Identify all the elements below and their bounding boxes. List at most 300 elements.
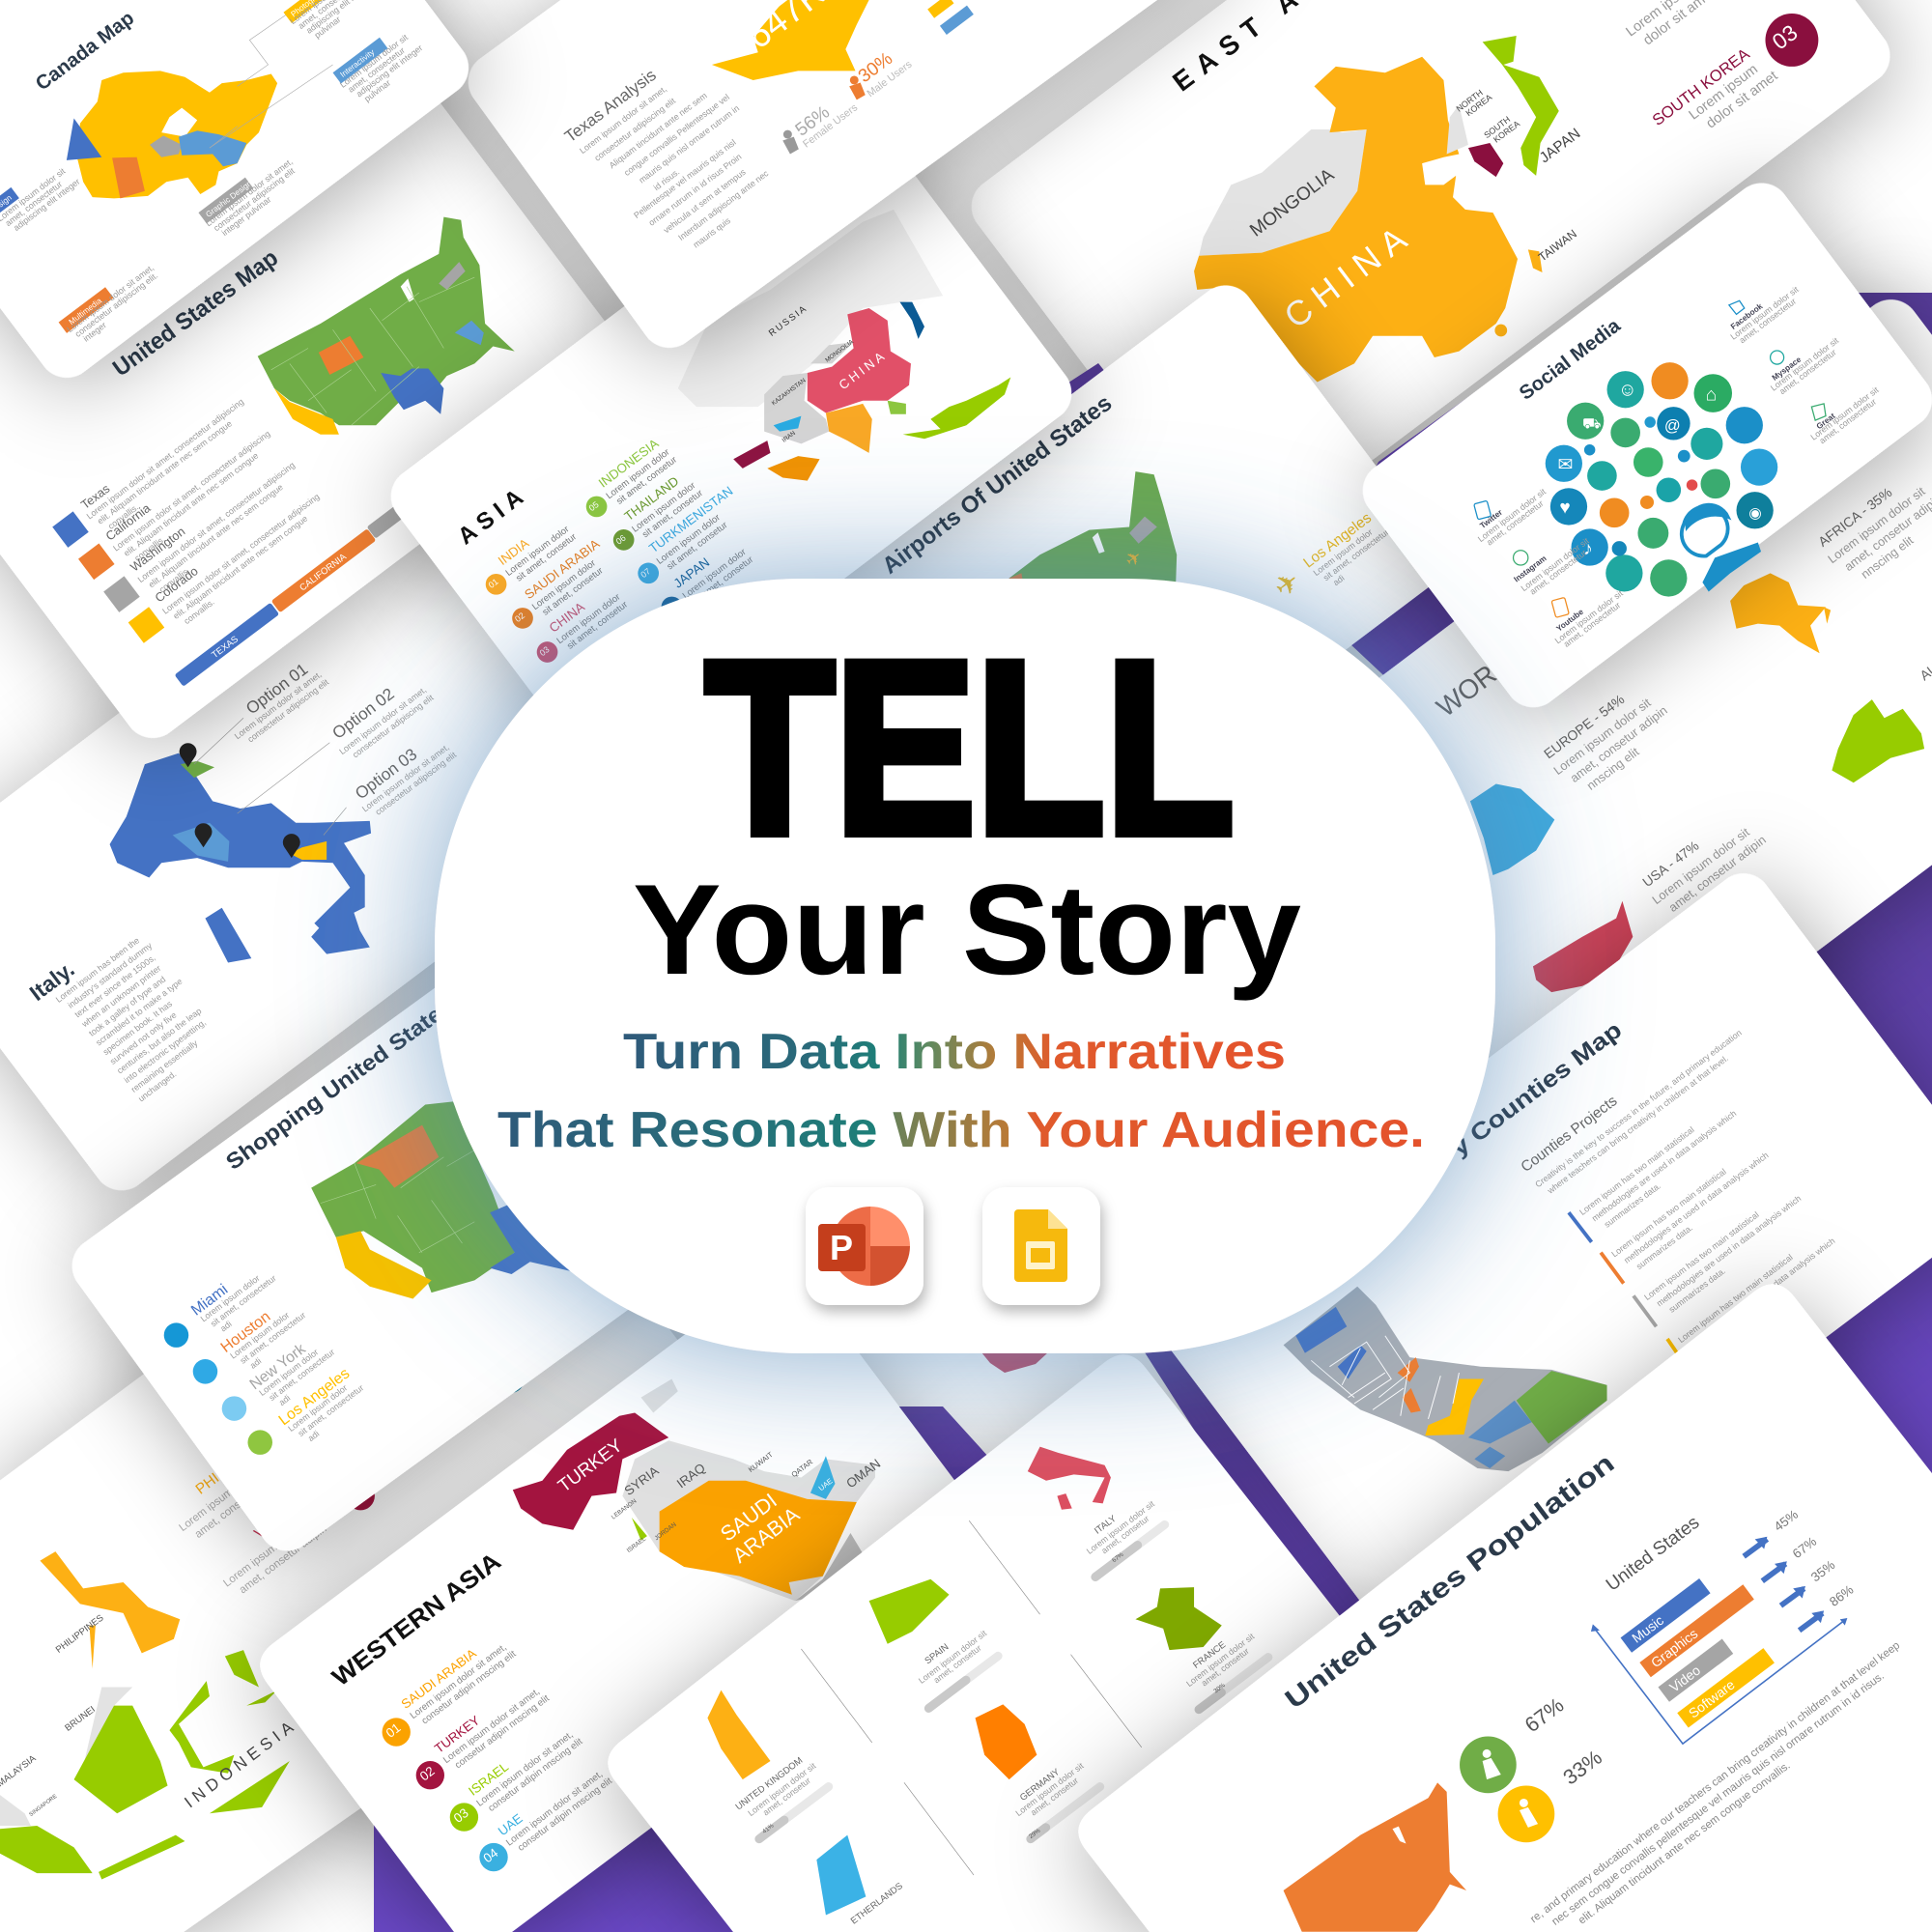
panel: Western Asia slide — [260, 1267, 1012, 1932]
panel: European countries slide: amet, consetur — [1029, 1776, 1080, 1817]
panel: Italy slide: consectetur adipiscing elit — [245, 677, 331, 744]
icon cluster: ◉ — [1748, 505, 1762, 522]
panel: Texas Analysis slide: Aliquam tincidunt ante nec sem — [608, 91, 709, 170]
panel: East Asia slide: Lorem ipsum — [1687, 62, 1761, 124]
panel: Italy slide: when an unknown printer — [79, 963, 162, 1030]
icon: PowerPoint: P — [830, 1228, 853, 1267]
panel: East Asia slide: MONGOLIA — [1246, 165, 1338, 242]
panel: European countries slide: 29% — [1028, 1828, 1042, 1840]
text block: population paragraph: re, and primary education where our teachers can bring creativity in children at that level keep — [1528, 1639, 1902, 1925]
panel: World slide: WOR — [1431, 659, 1502, 723]
panel: European countries slide: Lorem ipsum dolor sit — [1184, 1632, 1256, 1689]
panel: Airports Of United States slide: Los Angeles — [1300, 509, 1375, 571]
chart: bars: Software — [1686, 1676, 1738, 1721]
panel: United States Map slide: Lorem ipsum dolor sit amet, consectetur adipiscing — [136, 460, 297, 584]
map: Western Asia — [513, 1378, 875, 1601]
panel: World slide: Lorem ipsum dolor sit — [1649, 825, 1752, 907]
panel: Airports Of United States slide — [678, 273, 1454, 985]
panel: Southeast Asia slide: Lorem ipsum dolor sit amet, — [221, 1498, 338, 1589]
map: Italy — [1028, 1447, 1111, 1503]
panel: Western Asia slide: OMAN — [843, 1456, 883, 1491]
panel: United States Map slide: CALIFORNIA — [298, 552, 349, 593]
panel: Canada Map slide: integer — [81, 320, 108, 344]
panel: Asia slide: RUSSIA — [767, 303, 810, 339]
panel: Social Media slide: Lorem ipsum dolor sit — [1476, 487, 1548, 544]
map: Germany — [976, 1704, 1037, 1779]
panel: United States Map slide: Lorem ipsum dolor sit amet, consectetur adipiscing — [85, 397, 245, 521]
panel: Western Asia slide: Lorem ipsum dolor sit amet, — [504, 1769, 605, 1848]
panel: central title pill — [435, 579, 1495, 1353]
panel: Social Media slide: Instagram — [1512, 554, 1548, 584]
panel: Social Media slide: Social Media — [1516, 315, 1625, 405]
panel: Asia slide: 05 — [587, 499, 601, 513]
panel: Counties Map slide: methodologies are used in data analysis which — [1590, 1108, 1738, 1223]
panel: Canada Map slide: integer pulvinar — [220, 194, 272, 238]
icon cluster: ♥ — [1559, 497, 1571, 518]
panel: Counties Map slide: methodologies are used in data analysis which — [1622, 1151, 1771, 1265]
panel: Southeast Asia slide: amet, consetur adipin — [193, 1467, 285, 1541]
panel: Social Media slide: Twitter — [1478, 507, 1505, 530]
panel: Italy slide: Option 01 — [242, 659, 311, 718]
panel: Shopping United States slide: Miami — [188, 1281, 231, 1320]
map: world continents — [1470, 573, 1924, 992]
panel: Southeast Asia slide: PHILIPPINES — [193, 1430, 275, 1498]
panel: Canada Map slide: pulvinar — [313, 14, 343, 41]
panel: Western Asia slide: Lorem ipsum dolor sit amet, — [409, 1642, 509, 1721]
panel: United States Map slide: Washington — [128, 524, 187, 574]
panel: Counties Map slide — [1146, 862, 1932, 1657]
panel: Western Asia slide: ARABIA — [728, 1502, 805, 1568]
panel: Social Media slide: amet, consectetur — [1738, 297, 1798, 345]
panel: East Asia slide: dolor sit amet — [1704, 69, 1780, 131]
panel: Italy slide: specimen book. It has — [101, 999, 174, 1057]
chart: bars: 67% — [1790, 1534, 1819, 1561]
panel: Italy slide: scrambled it to make a type — [94, 977, 185, 1047]
panel: Texas Analysis slide: id risus. — [652, 167, 681, 192]
panel: Shopping United States slide: Lorem ipsum dolor — [286, 1382, 349, 1434]
panel: Canada Map slide: Canada Map — [32, 8, 138, 95]
panel: Asia slide: sit amet, consetur — [541, 565, 606, 618]
map: Canada — [67, 71, 277, 198]
panel: Counties Map slide: summarizes data. — [1667, 1265, 1727, 1315]
panel: Airports Of United States slide: Airports Of United States — [877, 390, 1117, 580]
panel: Social Media slide: amet, consectetur — [1777, 348, 1838, 396]
panel: Western Asia slide: consetur adipin nnscing elit — [487, 1736, 585, 1814]
title: TELL: TELL — [705, 611, 1235, 886]
panel: Shopping United States slide: Lorem ipsum dolor — [228, 1310, 291, 1361]
chart: bars: Video — [1666, 1662, 1703, 1695]
panel: United States Map slide: elit. Aliquam tincidunt ante nec sem congue — [171, 514, 309, 621]
panel: Social Media slide: Youtube — [1554, 607, 1585, 634]
icon: Google Slides — [982, 1187, 1100, 1305]
panel: Asia slide: JAPAN — [671, 554, 712, 591]
panel: Shopping United States slide: Lorem ipsum dolor — [199, 1273, 262, 1323]
panel: Counties Map slide: summarizes data. — [1603, 1180, 1662, 1230]
panel: Western Asia slide: SAUDI ARABIA — [399, 1646, 479, 1712]
panel: East Asia slide: JAPAN — [1537, 126, 1583, 166]
map: counties — [1284, 1287, 1607, 1471]
panel: Asia slide: Lorem ipsum dolor — [504, 524, 571, 579]
panel: World slide: nnscing elit — [1583, 744, 1642, 793]
panel: Southeast Asia slide: S — [185, 1422, 213, 1453]
panel: Southeast Asia slide: BRUNEI — [63, 1704, 98, 1734]
panel: Italy slide: consectetur adipiscing elit — [351, 693, 436, 759]
panel: Counties Map slide: summarizes data. — [1634, 1223, 1694, 1271]
panel: Texas Analysis slide: ornare rutrum in id risus Proin — [647, 152, 743, 228]
panel: Italy slide: Option 03 — [352, 744, 420, 803]
panel: United States Map slide: convallis. — [106, 502, 140, 531]
panel: Airports Of United States slide: ✈ — [1122, 547, 1147, 572]
map: China and neighbours — [1194, 36, 1559, 383]
panel: Canada Map slide: Lorem ipsum dolor sit amet, — [204, 156, 295, 228]
icon cluster: ⛟ — [1582, 415, 1601, 432]
panel: Shopping United States slide: sit amet, consectetur — [268, 1347, 336, 1403]
panel: Italy slide: unchanged. — [136, 1068, 178, 1104]
panel: Texas Analysis slide — [457, 0, 1239, 359]
panel: Western Asia slide: WESTERN ASIA — [327, 1548, 506, 1691]
panel: Texas Analysis slide: Texas Analysis — [561, 65, 660, 146]
panel: Southeast Asia slide: amet, consetur adipin — [238, 1523, 329, 1596]
panel: Italy slide: took a galley of type and — [87, 975, 167, 1038]
heading: Your Story: Your Story — [633, 859, 1301, 1002]
panel: Western Asia slide: Lorem ipsum dolor sit amet, — [475, 1730, 575, 1809]
panel: World slide: USA - 47% — [1639, 838, 1702, 890]
panel: East Asia slide: 03 — [1768, 19, 1803, 54]
panel: World slide: amet, consetur adipin — [1665, 833, 1769, 915]
panel: Canada Map slide: amet, consectetur — [346, 45, 407, 95]
panel: Western Asia slide: ISRAEL — [466, 1759, 511, 1799]
panel: United States Map slide: elit. Aliquam tincidunt ante nec sem congue — [96, 418, 234, 526]
panel: Western Asia slide: 01 — [384, 1720, 404, 1741]
panel: United States Map slide: Colorado — [152, 563, 201, 605]
panel: Social Media slide: amet, consectetur — [1562, 600, 1622, 649]
panel: Western Asia slide: JORDAN — [653, 1521, 678, 1542]
panel: Shopping United States slide: sit amet, consectetur — [297, 1382, 365, 1438]
panel: Counties Map slide: y Counties Map — [1447, 1017, 1627, 1162]
panel: United States Map slide: convallis. — [157, 565, 191, 595]
panel: Social Media slide: Lorem ipsum dolor sit — [1553, 588, 1625, 645]
panel: Airports Of United States slide: Lorem ipsum dolor — [1312, 527, 1375, 578]
map: western United States — [311, 1101, 570, 1299]
panel: Social Media slide: amet, consectetur — [1485, 498, 1546, 548]
panel: Western Asia slide: 04 — [480, 1845, 501, 1865]
panel: Texas Analysis slide: consectetur adipiscing elit — [592, 96, 677, 163]
panel: Canada Map slide: Multimedia — [67, 296, 103, 327]
panel: Italy slide: Italy. — [25, 956, 79, 1006]
panel: Asia slide: INDIA — [496, 536, 531, 568]
panel: Western Asia slide: LEBANON — [611, 1497, 639, 1521]
panel: Counties Map slide: Lorem ipsum has two main statistical — [1609, 1167, 1728, 1259]
panel: European countries slide: Lorem ipsum dolor sit — [917, 1629, 988, 1686]
panel: Asia slide: sit amet, consetur — [640, 488, 705, 540]
panel: United States Map slide: Lorem ipsum dolor sit amet, consectetur adipiscing — [111, 429, 272, 554]
panel: European countries slide — [608, 1354, 1587, 1932]
panel: Shopping United States slide: adi — [218, 1319, 234, 1334]
panel: Asia slide: 01 — [487, 577, 500, 590]
chart: bars: 45% — [1772, 1507, 1801, 1534]
panel: Counties Map slide: Creativity is the key to success in the future, and primary education — [1533, 1028, 1744, 1189]
icon cluster: ☺ — [1618, 381, 1637, 401]
panel: Social Media slide: Myspace — [1770, 355, 1804, 383]
panel: Western Asia slide: UAE — [496, 1811, 526, 1838]
panel: Asia slide: Lorem ipsum dolor — [605, 447, 671, 501]
panel: Counties Map slide: Lorem ipsum has two main statistical — [1676, 1252, 1795, 1345]
panel: East Asia slide: KOREA — [1492, 119, 1521, 145]
panel: East Asia slide: NORTH — [1455, 88, 1485, 114]
panel: European countries slide: Lorem ipsum dolor sit — [1085, 1499, 1156, 1556]
panel: Airports Of United States slide: ✈ — [1268, 565, 1306, 605]
panel: Italy slide: into electronic typesetting, — [123, 1017, 208, 1085]
panel: Asia slide: CHINA — [837, 348, 890, 392]
panel: Western Asia slide: KUWAIT — [747, 1450, 775, 1474]
panel: Italy slide: Option 02 — [328, 684, 398, 743]
panel: Asia slide: CHINA — [547, 600, 587, 636]
chart: bars: Music — [1629, 1612, 1666, 1646]
panel: Canada Map slide — [0, 0, 480, 389]
panel: Social Media slide: Lorem ipsum dolor sit — [1728, 284, 1801, 342]
panel: European countries slide: UNITED KINGDOM — [734, 1755, 805, 1812]
panel: Asia slide: IRAN — [781, 430, 797, 444]
panel: United States Map slide: elit. Aliquam tincidunt ante nec sem congue — [147, 482, 285, 589]
panel: Italy slide — [0, 463, 685, 1202]
subtitle line 2: That Resonate With Your Audience. — [497, 1102, 1425, 1158]
panel: Counties Map slide: methodologies are used in data analysis which — [1689, 1236, 1836, 1350]
panel: Shopping United States slide: Lorem ipsum dolor — [257, 1347, 320, 1398]
panel: United States Map slide: United States Map — [108, 244, 283, 382]
chart: bars: 35% — [1808, 1557, 1837, 1584]
panel: European countries slide: 41% — [761, 1822, 776, 1835]
panel: hidden map fragment — [981, 1352, 1048, 1373]
panel: World slide: AFRICA - 35% — [1815, 484, 1894, 550]
panel: Western Asia slide: UAE — [817, 1477, 835, 1492]
panel: Italy slide: Lorem ipsum dolor sit amet, — [360, 742, 451, 813]
panel: Southeast Asia slide — [0, 1109, 787, 1932]
text block: population paragraph: nec sem congue convallis pellentesque vel mauris quis nisl ornare rutrum in id risus. — [1550, 1670, 1887, 1928]
panel: Social Media slide: Lorem ipsum dolor sit — [1769, 335, 1840, 393]
panel: World slide: nnscing elit — [1858, 532, 1917, 582]
icon cluster: ⌂ — [1706, 385, 1717, 406]
panel: Canada Map slide: adipiscing elit integer — [355, 43, 424, 99]
panel: European countries slide: FRANCE — [1191, 1639, 1228, 1671]
panel: Southeast Asia slide: Lorem ipsum dolor sit amet, — [177, 1442, 294, 1534]
panel: Shopping United States slide: sit amet, consectetur — [209, 1273, 278, 1328]
panel: Social Media slide: Lorem ipsum dolor sit — [1520, 536, 1591, 593]
icon cluster: @ — [1664, 416, 1681, 435]
panel: Asia slide: MONGOLIA — [824, 338, 855, 364]
panel: Shopping United States slide: adi — [248, 1356, 263, 1371]
panel: Italy slide: Lorem ipsum has been the — [54, 935, 141, 1005]
panel: East Asia slide: SOUTH — [1482, 114, 1512, 140]
panel: Southeast Asia slide: VIETNAM — [251, 1490, 314, 1543]
panel: Western Asia slide: TURKEY — [554, 1435, 627, 1496]
map: Texas — [712, 0, 875, 80]
panel: Western Asia slide: consetur adipin nnscing elit — [516, 1776, 614, 1854]
panel: European countries slide: amet, consetur — [932, 1643, 983, 1685]
panel: Asia slide: sit amet, consetur — [565, 599, 631, 652]
panel: Asia slide: sit amet, consetur — [665, 520, 730, 572]
panel: Canada Map slide: Lorem ipsum dolor sit amet, — [65, 263, 156, 334]
panel: Social Media slide: Facebook — [1728, 300, 1765, 331]
panel: Asia slide: Lorem ipsum dolor — [554, 592, 622, 646]
panel: East Asia slide: KOREA — [1463, 92, 1493, 118]
panel: Asia slide: THAILAND — [622, 473, 682, 524]
panel: Asia slide: 06 — [614, 533, 628, 547]
panel: European countries slide: amet, consetur — [1200, 1646, 1251, 1689]
panel: European countries slide: amet, consetur — [1099, 1514, 1151, 1555]
purple background pieces — [374, 293, 1932, 1932]
panel: Canada Map slide: Graphic Design — [204, 178, 254, 219]
icon cluster: ✉ — [1557, 455, 1574, 475]
chart: bars: Graphics — [1648, 1626, 1700, 1670]
panel: Italy slide: survived not only five — [108, 1010, 179, 1066]
panel: Asia slide — [380, 119, 1083, 770]
panel: Texas Analysis slide: 56% — [792, 102, 834, 141]
panel: United States Map slide: convallis. — [182, 597, 216, 626]
panel: Canada Map slide: amet, consectetur — [4, 179, 64, 228]
panel: Asia slide: sit amet, consetur — [691, 554, 756, 607]
panel: European countries slide: 30% — [1212, 1682, 1227, 1694]
panel: Social Media slide: Great — [1814, 411, 1837, 431]
panel: United States Map slide: Texas — [78, 481, 112, 512]
map: United Kingdom — [707, 1690, 771, 1779]
panel: Social Media slide: amet, consectetur — [1528, 548, 1588, 597]
panel: European countries slide: ETHERLANDS — [849, 1881, 905, 1926]
map: United States orange — [1284, 1782, 1466, 1932]
panel: Shopping United States slide: adi — [277, 1393, 292, 1407]
panel: European countries slide: ITALY — [1093, 1513, 1119, 1537]
chart: bars: 86% — [1827, 1582, 1857, 1609]
panel: European countries slide: Lorem ipsum dolor sit — [746, 1761, 817, 1818]
icon: male share — [1498, 1786, 1554, 1842]
panel: Texas Analysis slide: congue convallis Pellentesque vel — [622, 92, 731, 178]
panel: Western Asia slide: 03 — [451, 1805, 471, 1826]
panel: Asia slide: sit amet, consetur — [514, 531, 580, 584]
panel: Texas Analysis slide: mauris quis nisl ornare rutrum in — [637, 103, 741, 185]
panel: Asia slide: Lorem ipsum dolor — [681, 547, 749, 602]
panel: Western Asia slide: TURKEY — [432, 1713, 482, 1756]
map: Asia — [678, 210, 1010, 481]
panel: European countries slide: 67% — [1111, 1551, 1125, 1564]
map: United States green — [258, 217, 515, 435]
panel: Social Media slide: Lorem ipsum dolor sit — [1808, 384, 1881, 442]
panel: Texas Analysis slide: mauris quis — [692, 215, 732, 250]
panel: Airports Of United States slide: sit amet, consectetur — [1321, 527, 1391, 582]
panel: World slide — [1189, 288, 1932, 1207]
panel: Asia slide: Lorem ipsum dolor — [530, 558, 598, 612]
panel: European countries slide: SPAIN — [923, 1642, 951, 1666]
panel: Texas Analysis slide: Pellentesque vel mauris quis nisl — [632, 137, 738, 220]
panel: United States Population slide: 67% — [1520, 1692, 1568, 1737]
panel: Western Asia slide: consetur adipin nnscing elit — [453, 1693, 552, 1771]
panel: Western Asia slide: IRAQ — [674, 1461, 708, 1491]
panel: Shopping United States slide: sit amet, consectetur — [239, 1310, 307, 1366]
panel: World slide: amet, consetur adipin — [1567, 703, 1670, 785]
panel: Italy slide: remaining essentially — [129, 1037, 200, 1094]
panel: Counties Map slide: Lorem ipsum has two main statistical — [1577, 1124, 1696, 1217]
panel: Canada Map slide: adipiscing elit integer — [12, 177, 82, 233]
panel: Counties Map slide: methodologies are used in data analysis which — [1655, 1193, 1803, 1308]
panel: Texas Analysis slide: Lorem ipsum dolor sit amet, — [578, 84, 668, 156]
panel: United States Population slide: 33% — [1558, 1745, 1606, 1790]
panel: United States Map slide: TEXAS — [210, 634, 241, 661]
panel: Asia slide: KAZAKHSTAN — [771, 377, 808, 407]
chart: bars: United States — [1603, 1513, 1703, 1596]
panel: Texas Analysis slide: vehicula ut sem at tempus — [662, 167, 748, 235]
panel: World slide: EUROPE - 54% — [1541, 692, 1627, 761]
map: Spain — [869, 1579, 950, 1644]
panel: Asia slide: 07 — [639, 566, 652, 580]
panel: Italy slide: consectetur adipiscing elit — [374, 750, 459, 817]
panel: Italy slide: Lorem ipsum dolor sit amet, — [337, 685, 428, 756]
panel: European countries slide: GERMANY — [1018, 1767, 1063, 1804]
panel: Social Media slide — [1351, 172, 1932, 719]
panel: Shopping United States slide: Shopping United States — [221, 993, 458, 1175]
icon: female share — [1460, 1737, 1517, 1793]
panel: Italy slide: industry's standard dummy — [66, 940, 155, 1010]
panel: World slide: Lorem ipsum dolor sit — [1550, 696, 1654, 778]
panel: Texas Analysis slide: Male Users — [865, 58, 915, 99]
panel: Texas Analysis slide: Female Users — [801, 101, 861, 151]
panel: Asia slide: 02 — [513, 611, 526, 624]
panel: Airports Of United States slide: adi — [1331, 573, 1347, 587]
panel: East Asia slide: CHINA — [1277, 214, 1421, 336]
panel: Italy slide: centuries, but also the leap — [115, 1006, 203, 1075]
icon cluster: ♪ — [1583, 539, 1593, 559]
panel: Counties Map slide: where teachers can bring creativity in children at that level. — [1545, 1053, 1730, 1196]
panel: Southeast Asia slide: PHILIPPINES — [54, 1612, 106, 1656]
panel: Western Asia slide: consetur adipin nnscing elit — [420, 1649, 519, 1726]
chart: bars — [1591, 1507, 1857, 1744]
subtitle line 1: Turn Data Into Narratives — [623, 1024, 1286, 1080]
panel: Asia slide: sit amet, consetur — [614, 454, 680, 507]
panel: Western Asia slide: SYRIA — [622, 1463, 662, 1498]
panel: Counties Map slide: Counties Projects — [1518, 1093, 1621, 1176]
panel: East Asia slide: TAIWAN — [1536, 227, 1579, 265]
panel: Italy slide: text ever since the 1500s, — [72, 952, 157, 1019]
icon: PowerPoint — [806, 1187, 923, 1305]
panel: Texas Analysis slide: Interdum adipiscing ante nec — [676, 168, 771, 242]
panel: East Asia slide — [960, 0, 1901, 564]
panel: Canada Map slide: Interactivity — [338, 46, 377, 79]
panel: Shopping United States slide: Los Angeles — [276, 1365, 353, 1429]
panel: Canada Map slide: consectetur adipiscing elit — [212, 165, 297, 233]
panel: Canada Map slide: pulvinar — [362, 78, 392, 103]
panel: Canada Map slide: Lorem ipsum dolor sit — [338, 33, 410, 90]
panel: Southeast Asia slide: INDONESIA — [181, 1715, 300, 1811]
panel: United States Population slide: United States Population — [1279, 1448, 1620, 1715]
panel: Asia slide: SAUDI ARABIA — [522, 536, 602, 602]
panel: Western Asia slide: SAUDI — [716, 1489, 781, 1547]
panel: Western Asia slide: QATAR — [790, 1458, 814, 1479]
panel: Social Media slide: amet, consectetur — [1818, 397, 1878, 445]
panel: Western Asia slide: ISRAEL — [626, 1535, 647, 1554]
panel: Western Asia slide: 02 — [417, 1764, 438, 1783]
panel: Shopping United States slide: adi — [306, 1429, 321, 1443]
panel: East Asia slide: SOUTH KOREA — [1649, 44, 1753, 129]
panel: Asia slide: Lorem ipsum dolor — [630, 480, 697, 535]
panel: World slide: Lorem ipsum dolor sit — [1825, 484, 1928, 566]
panel: Counties Map slide: Lorem ipsum has two main statistical — [1642, 1209, 1761, 1302]
panel: United States Population slide — [1078, 1284, 1932, 1932]
panel: Shopping United States slide: Houston — [218, 1309, 273, 1356]
panel: Canada Map slide: consectetur adipiscing elit. — [73, 270, 159, 339]
panel: Italy slide: Lorem ipsum dolor sit amet, — [233, 669, 324, 741]
map: France — [1135, 1587, 1222, 1650]
panel: Asia slide: ASIA — [453, 481, 533, 550]
panel: Asia slide: 03 — [538, 644, 552, 658]
map: Netherlands — [816, 1835, 866, 1916]
panel: Asia slide: Lorem ipsum dolor — [655, 512, 723, 567]
